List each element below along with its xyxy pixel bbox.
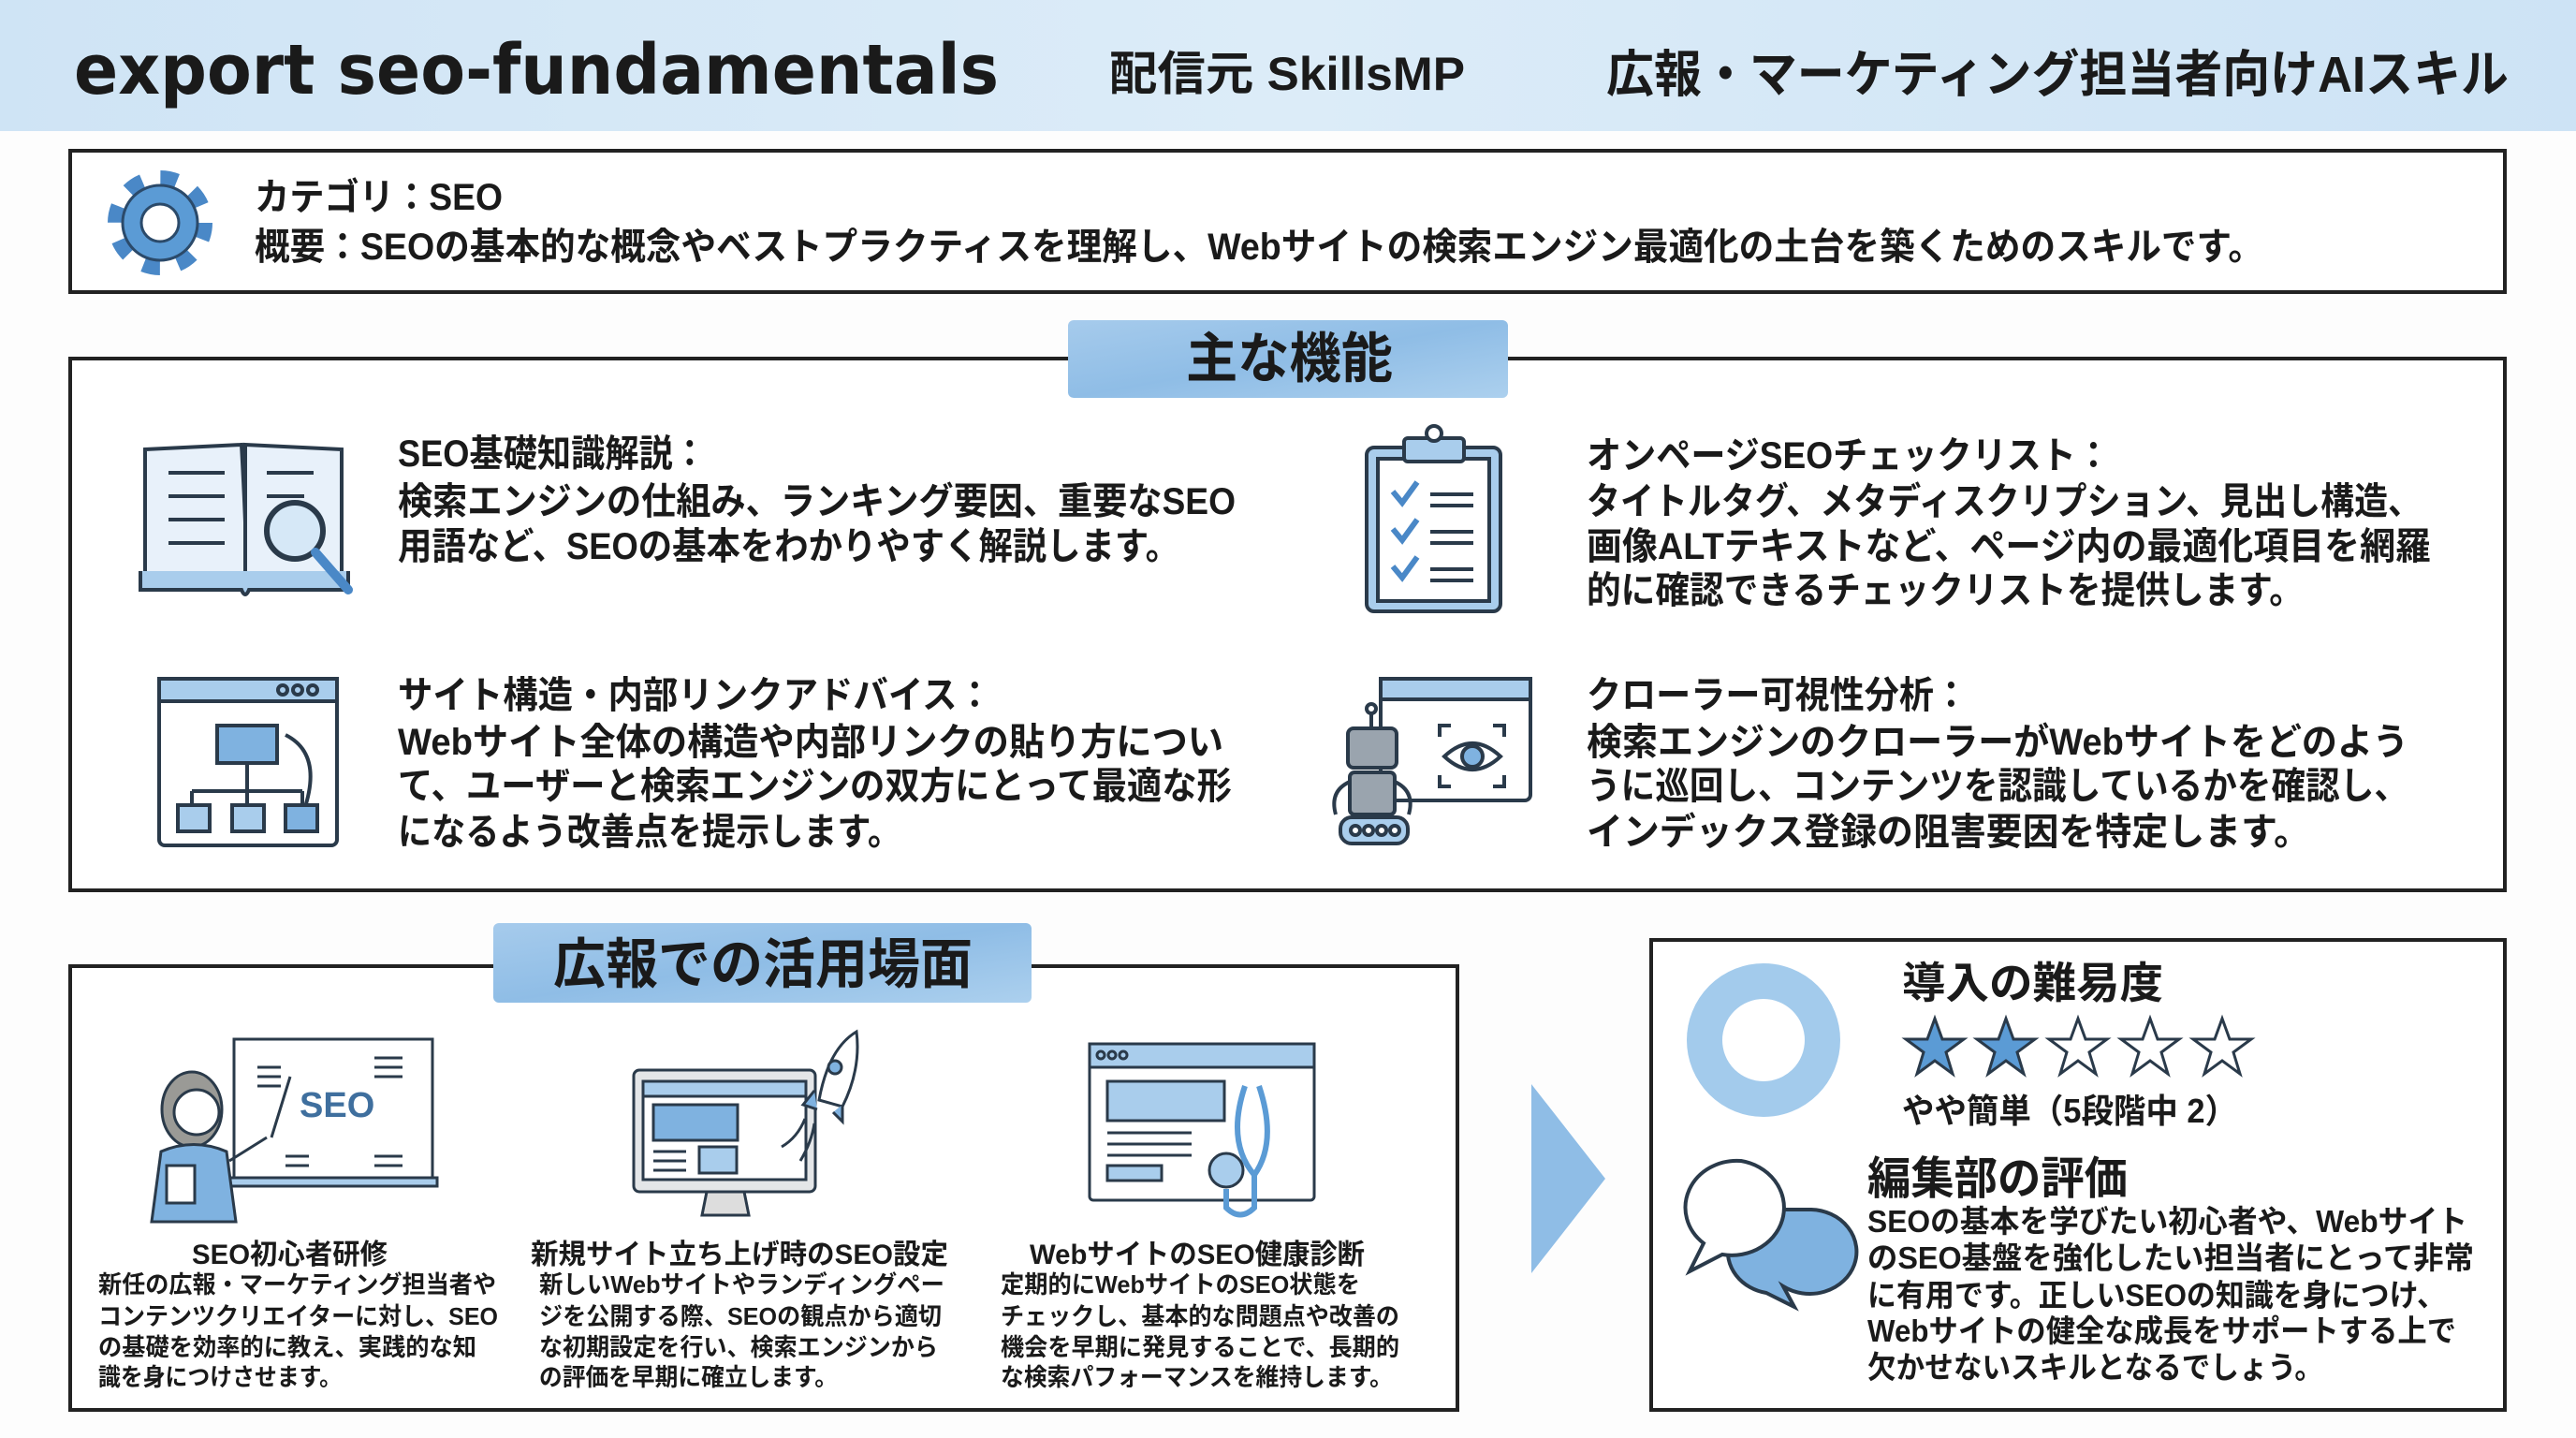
feature: site structure advice: になるよう改善点を提示します。: [398, 812, 901, 853]
feature: SEO basics: [398, 433, 1236, 567]
editorial text: Webサイトの健全な成長をサポートする上で: [1867, 1313, 2456, 1348]
editorial text: 欠かせないスキルとなるでしょう。: [1867, 1350, 2323, 1385]
feature: site structure advice: Webサイト全体の構造や内部リンクの貼り方につい: [398, 722, 1223, 763]
icon: gear: [115, 178, 205, 268]
icon: teacher with board: [152, 1039, 437, 1222]
use case: site health check: [1001, 1240, 1399, 1391]
icon: ring: [1705, 981, 1822, 1099]
use case: new site SEO setup: 新しいWebサイトやランディングペー: [539, 1270, 944, 1299]
use case: new site SEO setup: 新規サイト立ち上げ時のSEO設定: [531, 1240, 948, 1270]
use case: new site SEO setup: の評価を早期に確立します。: [539, 1363, 838, 1391]
arrow: [1531, 1084, 1605, 1273]
editorial text: に有用です。正しいSEOの知識を身につけ、: [1867, 1278, 2446, 1313]
feature: on-page checklist: 画像ALTテキストなど、ページ内の最適化項目を網羅: [1587, 526, 2431, 567]
source label: 配信元 SkillsMP: [1109, 48, 1465, 100]
feature: crawler visibility: インデックス登録の阻害要因を特定します。: [1587, 811, 2310, 853]
feature: SEO basics: 検索エンジンの仕組み、ランキング要因、重要なSEO: [398, 481, 1236, 522]
editorial text: SEOの基本を学びたい初心者や、Webサイト: [1867, 1204, 2467, 1239]
use case: beginner training: 新任の広報・マーケティング担当者や: [98, 1270, 496, 1299]
editorial text: [1867, 1204, 2474, 1385]
star rating: [1906, 1019, 2251, 1074]
difficulty heading: 導入の難易度: [1902, 959, 2163, 1007]
audience label: 広報・マーケティング担当者向けAIスキル: [1606, 47, 2509, 103]
feature: SEO basics: SEO基礎知識解説：: [398, 433, 707, 475]
category text: カテゴリ：SEO: [255, 177, 503, 218]
editorial text: のSEO基盤を強化したい担当者にとって非常: [1867, 1240, 2474, 1275]
panel: main features: [70, 320, 2505, 890]
feature: on-page checklist: 的に確認できるチェックリストを提供します。: [1587, 570, 2304, 611]
use case: site health check: な検索パフォーマンスを維持します。: [1001, 1363, 1393, 1391]
use case: site health check: チェックし、基本的な問題点や改善の: [1001, 1302, 1399, 1330]
icon: book with magnifier: [140, 445, 348, 594]
icon: website with stethoscope: [1090, 1044, 1314, 1215]
feature: on-page checklist: タイトルタグ、メタディスクリプション、見出し構造、: [1587, 480, 2422, 522]
panel: overview: [70, 151, 2505, 292]
title: export seo-fundamentals: [74, 30, 999, 110]
feature: crawler visibility: うに巡回し、コンテンツを認識しているかを確認し、: [1587, 766, 2408, 807]
feature: site structure advice: サイト構造・内部リンクアドバイス：: [398, 675, 992, 716]
use case: new site SEO setup: ジを公開する際、SEOの観点から適切: [539, 1302, 942, 1330]
use case: beginner training: の基礎を効率的に教え、実践的な知: [98, 1333, 476, 1361]
icon: speech bubbles: [1686, 1161, 1856, 1307]
icon: site structure: [159, 679, 337, 845]
difficulty text: やや簡単（5段階中 2）: [1902, 1092, 2237, 1130]
icon: teacher with board: SEO: [300, 1086, 374, 1125]
icon: checklist clipboard: [1367, 426, 1500, 611]
use case: site health check: 定期的にWebサイトのSEO状態を: [1001, 1270, 1360, 1299]
icon: crawler robot: [1334, 679, 1530, 844]
heading: main features: [1068, 320, 1508, 398]
header band: [0, 0, 2576, 131]
use case: site health check: 機会を早期に発見することで、長期的: [1001, 1333, 1399, 1361]
feature: crawler visibility: [1587, 675, 2408, 853]
use case: new site SEO setup: [531, 1240, 948, 1391]
feature: on-page checklist: [1587, 435, 2431, 611]
heading: use cases: 広報での活用場面: [553, 934, 973, 995]
feature: on-page checklist: オンページSEOチェックリスト：: [1587, 435, 2111, 477]
summary text: 概要：SEOの基本的な概念やベストプラクティスを理解し、Webサイトの検索エンジン最適化の土台を築くためのスキルです。: [255, 227, 2263, 268]
feature: crawler visibility: 検索エンジンのクローラーがWebサイトをどのよう: [1587, 722, 2408, 763]
use case: beginner training: [98, 1240, 498, 1391]
feature: crawler visibility: クローラー可視性分析：: [1587, 675, 1969, 716]
use case: beginner training: SEO初心者研修: [192, 1240, 388, 1270]
use case: new site SEO setup: な初期設定を行い、検索エンジンから: [539, 1333, 938, 1361]
use case: beginner training: コンテンツクリエイターに対し、SEO: [98, 1302, 498, 1330]
panel: PR use cases: [70, 923, 1457, 1410]
panel: evaluation: [1651, 940, 2505, 1410]
heading: use cases: [493, 923, 1032, 1003]
feature: site structure advice: [398, 675, 1232, 853]
use case: site health check: WebサイトのSEO健康診断: [1030, 1240, 1365, 1270]
editorial heading: 編集部の評価: [1867, 1154, 2128, 1204]
heading: main features: 主な機能: [1186, 329, 1393, 389]
feature: site structure advice: て、ユーザーと検索エンジンの双方にとって最適な形: [398, 766, 1232, 807]
use case: beginner training: 識を身につけさせます。: [98, 1363, 342, 1391]
icon: monitor with rocket: [634, 1032, 857, 1215]
feature: SEO basics: 用語など、SEOの基本をわかりやすく解説します。: [398, 526, 1179, 567]
